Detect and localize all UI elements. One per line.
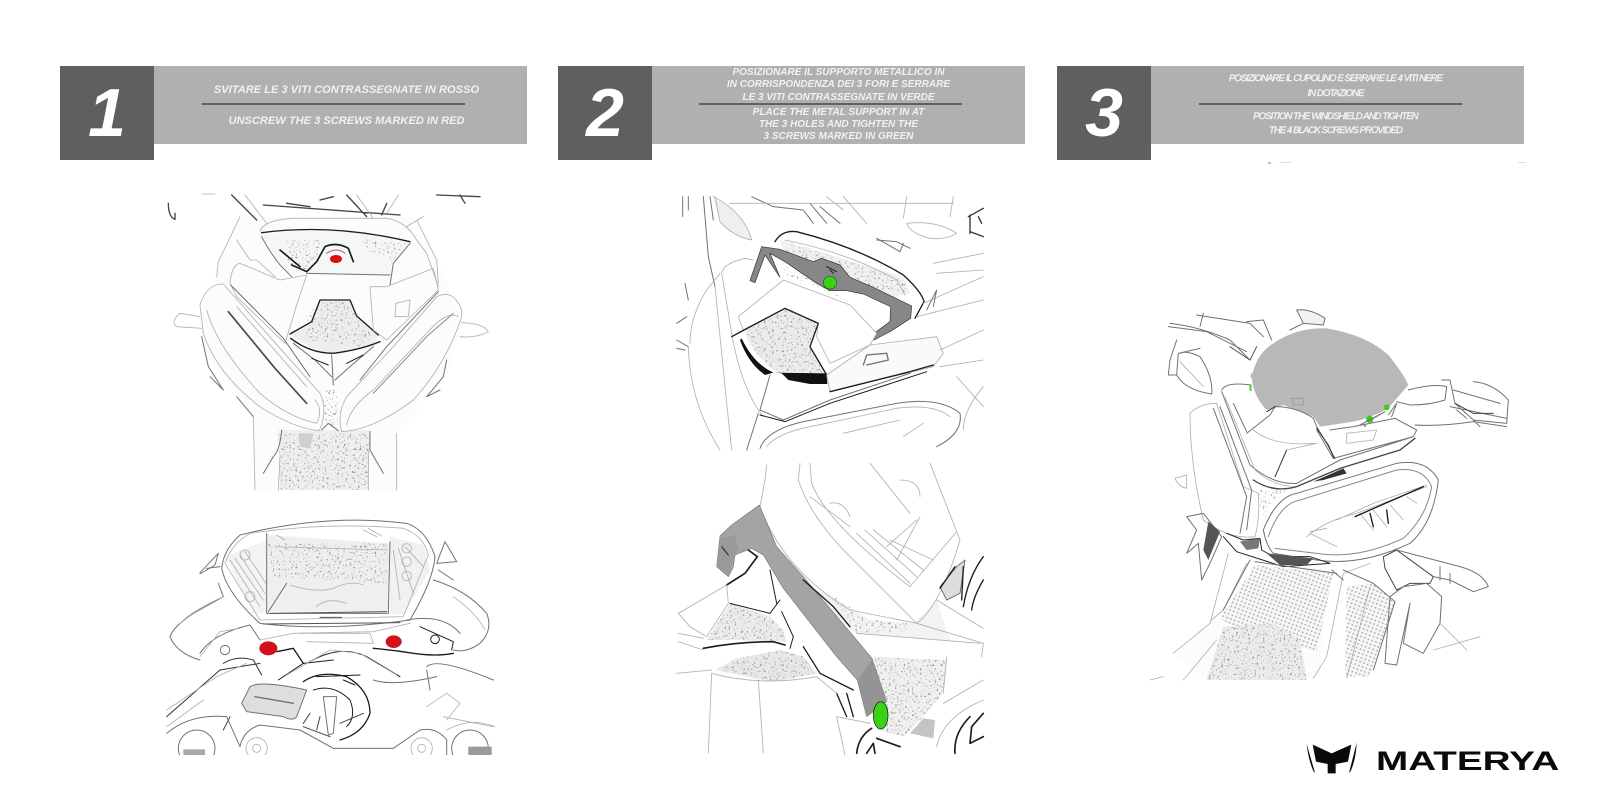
metal support side profile	[717, 505, 887, 717]
step 3 instruction bar	[1151, 66, 1524, 144]
logo wordmark: MATERYA	[1376, 746, 1559, 776]
English instruction: UNSCREW THE 3 SCREWS MARKED IN RED	[228, 115, 465, 127]
step number 3	[1057, 66, 1151, 160]
Italian instruction: LE 3 VITI CONTRASSEGNATE IN VERDE	[742, 92, 935, 103]
Italian instruction: POSIZIONARE IL SUPPORTO METALLICO IN	[732, 67, 945, 78]
logo icon	[1307, 743, 1357, 773]
English instruction: POSITION THE WINDSHIELD AND TIGHTEN	[1253, 111, 1418, 122]
step 1 instruction bar	[154, 66, 527, 144]
Italian instruction: SVITARE LE 3 VITI CONTRASSEGNATE IN ROSSO	[214, 84, 479, 96]
sketch: instrument cluster with two red screws	[166, 520, 496, 755]
English instruction: THE 3 HOLES AND TIGHTEN THE	[759, 119, 918, 130]
sketch: metal support installed, top view	[676, 196, 984, 450]
step number 2: 2	[586, 75, 624, 151]
sketch: front fairing with top red screw	[168, 194, 489, 490]
English instruction: PLACE THE METAL SUPPORT IN AT	[753, 107, 924, 118]
English instruction	[1253, 111, 1419, 136]
step 1 header	[60, 66, 527, 160]
English instruction	[752, 107, 925, 142]
Italian instruction: POSIZIONARE IL CUPOLINO E SERRARE LE 4 VITI NERE	[1229, 73, 1442, 84]
step number 2	[558, 66, 652, 160]
sketch: metal support, side view	[676, 463, 984, 756]
metal support bracket	[750, 247, 912, 340]
screw marker: green	[823, 276, 837, 289]
step number 1	[60, 66, 154, 160]
screw markers: green	[1249, 373, 1390, 427]
Italian instruction: IN DOTAZIONE	[1307, 88, 1364, 99]
step 3 header	[1057, 66, 1524, 160]
step 2 instruction bar	[652, 66, 1025, 144]
screw marker: red left	[259, 641, 277, 655]
logo: Materya	[1306, 742, 1559, 776]
screw marker: green	[873, 702, 888, 729]
English instruction: 3 SCREWS MARKED IN GREEN	[763, 131, 914, 142]
sketch: windshield installed on motorcycle	[1150, 309, 1509, 680]
step number 1: 1	[88, 75, 126, 151]
Italian instruction: IN CORRISPONDENZA DEI 3 FORI E SERRARE	[727, 79, 950, 90]
step number 3: 3	[1085, 75, 1123, 151]
screw marker: red	[330, 255, 342, 263]
screw marker: red right	[386, 635, 402, 648]
windshield	[1252, 328, 1408, 427]
step 2 header	[558, 66, 1025, 160]
stray marks under step 3 header	[1268, 162, 1526, 164]
English instruction: THE 4 BLACK SCREWS PROVIDED	[1269, 125, 1402, 136]
Italian instruction	[1229, 73, 1444, 99]
Italian instruction	[727, 67, 950, 103]
